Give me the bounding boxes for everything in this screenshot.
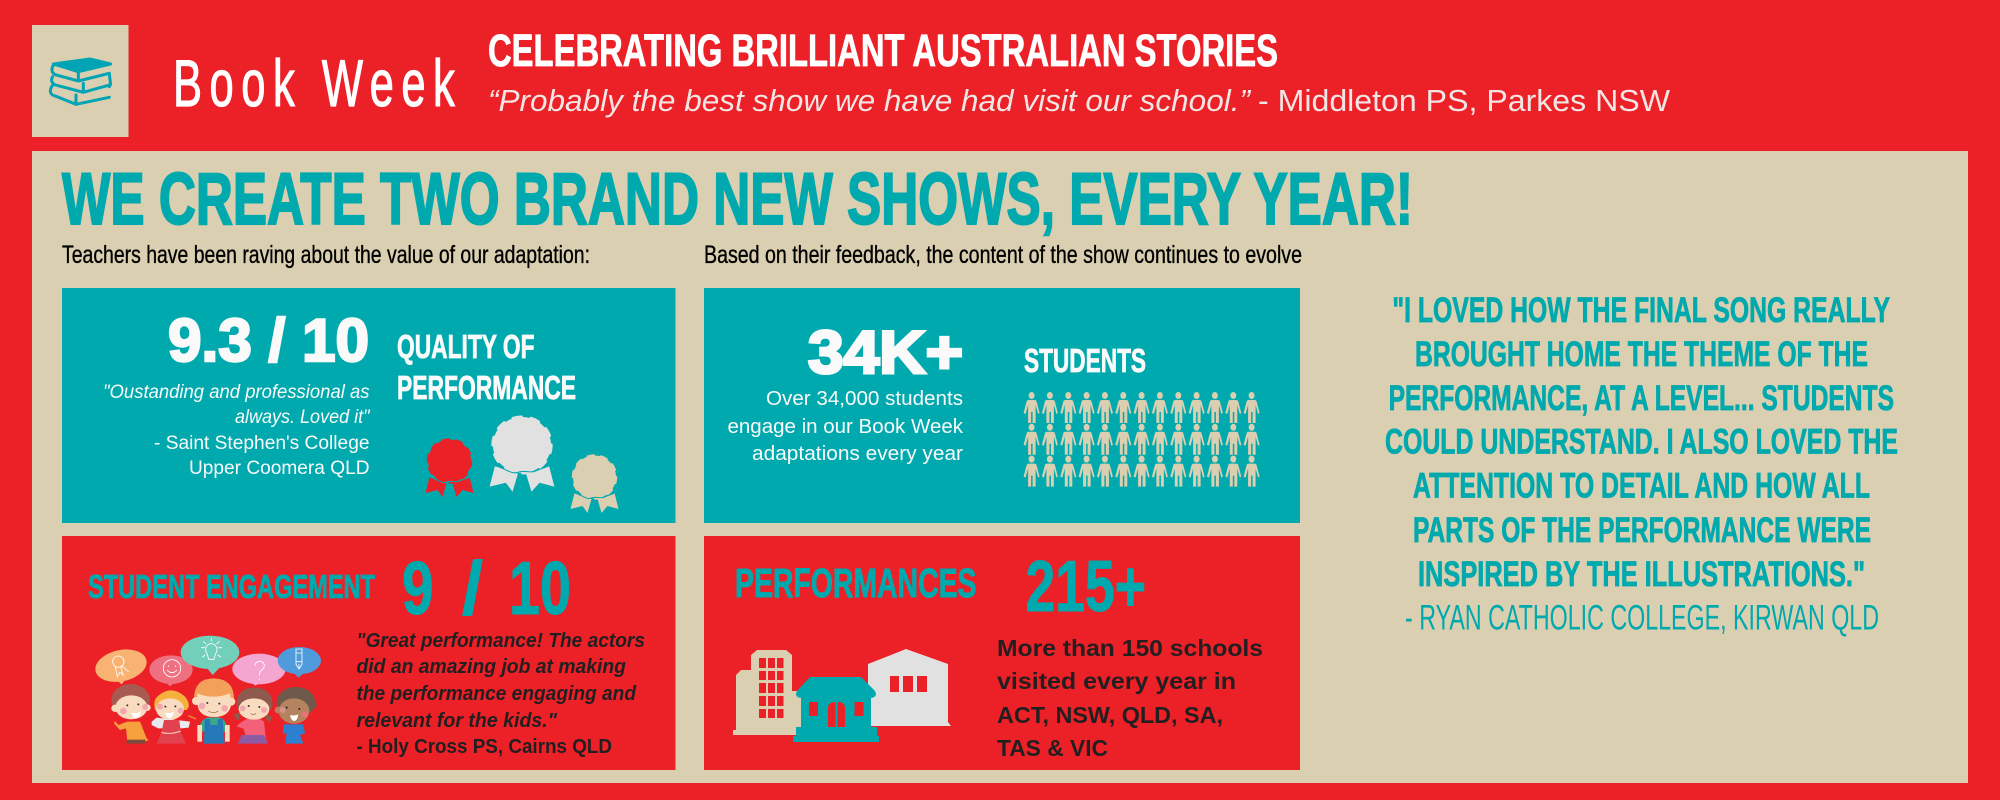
description: students: Over 34,000 students	[766, 387, 963, 410]
description: students: adaptations every year	[752, 442, 963, 465]
header icon tile: books	[32, 25, 128, 137]
icon: beige tower	[733, 650, 802, 735]
kid 5	[275, 687, 317, 744]
quote: Holy Cross PS	[356, 630, 645, 758]
stat: 9 / 10	[402, 546, 571, 630]
testimonial: Ryan Catholic College	[1385, 290, 1898, 638]
quote: Saint Stephen's College: - Saint Stephen's College	[154, 433, 370, 454]
stat: 215+: 215+	[1026, 547, 1146, 627]
icon: school buildings	[733, 649, 951, 742]
main beige panel	[32, 151, 1968, 783]
quote: Saint Stephen's College: Upper Coomera QLD	[189, 458, 370, 479]
speech bubbles	[92, 636, 321, 686]
stat: 9 / 10: 9	[402, 546, 434, 630]
label: quality of performance: PERFORMANCE	[397, 369, 576, 406]
kid 4	[234, 688, 273, 744]
stat: 34K+: 34K+	[808, 319, 963, 386]
quote: Saint Stephen's College	[103, 382, 371, 479]
quote: Saint Stephen's College: always. Loved it"	[235, 407, 371, 428]
icon: teal school	[793, 677, 879, 742]
quote: Holy Cross PS: relevant for the kids."	[356, 710, 557, 732]
icon: red rosette	[426, 440, 474, 497]
description: students: engage in our Book Week	[728, 415, 964, 438]
quote: Holy Cross PS: "Great performance! The actors	[356, 630, 645, 652]
label: quality of performance: QUALITY OF	[397, 328, 534, 365]
quote: Saint Stephen's College: "Oustanding and professional as	[103, 382, 370, 403]
main title: WE CREATE TWO BRAND NEW SHOWS, EVERY YEAR!	[62, 159, 1413, 240]
description: performances: More than 150 schools	[997, 635, 1263, 661]
header testimonial: “Probably the best show we have had visit our school.”	[488, 83, 1252, 118]
quote: Holy Cross PS: - Holy Cross PS, Cairns QLD	[356, 736, 612, 758]
icon: stack of books	[50, 59, 111, 104]
description: performances	[997, 635, 1263, 761]
stat: 9 / 10: /	[462, 546, 483, 630]
subheading: middle column: Based on their feedback, the content of the show continues to evolve	[704, 241, 1302, 269]
quote: Holy Cross PS: the performance engaging and	[356, 683, 637, 705]
header testimonial	[488, 83, 1671, 118]
label: student engagement: STUDENT ENGAGEMENT	[88, 569, 375, 606]
heading: Book Week: Book Week	[173, 46, 456, 120]
panel: students	[704, 288, 1300, 523]
stat: 9.3 / 10: 9.3 / 10	[168, 307, 369, 374]
header testimonial: - Middleton PS, Parkes NSW	[1258, 83, 1671, 118]
subheading: left column: Teachers have been raving about the value of our adaptation:	[62, 241, 590, 269]
panel: student engagement	[62, 536, 676, 770]
description: performances: ACT, NSW, QLD, SA,	[997, 702, 1223, 728]
icon: white hall	[868, 649, 951, 726]
label: students: STUDENTS	[1024, 342, 1146, 379]
illustration: children with speech bubbles	[92, 636, 321, 744]
icon: white rosette	[490, 417, 554, 492]
label: quality of performance	[397, 328, 576, 406]
description: students	[728, 387, 964, 465]
kid 1	[111, 684, 151, 744]
panel: performances	[704, 536, 1300, 770]
stat: 9 / 10: 10	[509, 546, 571, 630]
description: performances: TAS & VIC	[997, 735, 1108, 761]
quote: Holy Cross PS: did an amazing job at making	[356, 656, 626, 678]
kid 2	[152, 690, 196, 744]
description: performances: visited every year in	[997, 668, 1236, 694]
kid 3	[192, 678, 235, 744]
panel: quality of performance	[62, 288, 676, 523]
label: performances: PERFORMANCES	[735, 560, 976, 606]
pictogram: rows of people	[1024, 392, 1260, 487]
heading: celebrating: CELEBRATING BRILLIANT AUSTRALIAN STORIES	[488, 25, 1278, 76]
icon: beige rosette	[570, 456, 618, 513]
